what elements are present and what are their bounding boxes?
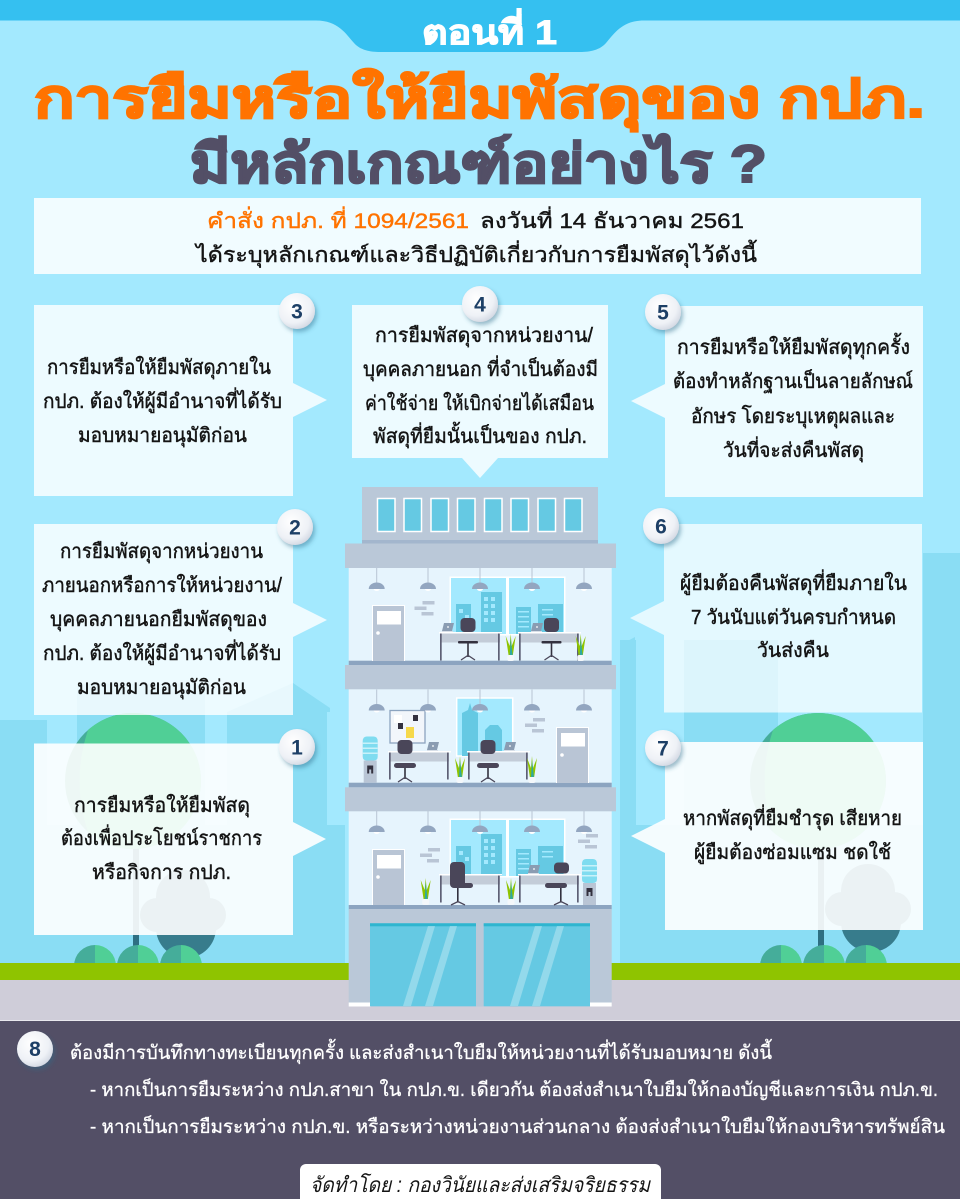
floor 1 office bbox=[369, 811, 598, 905]
badge 3 bbox=[279, 293, 315, 329]
credit box bbox=[300, 1164, 661, 1199]
grass strip bbox=[0, 963, 960, 980]
callout 2: การยืมพัสดุจากหน่วยงาน bbox=[60, 541, 263, 564]
callout 2: ภายนอกหรือการให้หน่วยงาน/ bbox=[42, 574, 282, 597]
callout 2: บุคคลภายนอกยืมพัสดุของ bbox=[50, 609, 267, 632]
badge 1 bbox=[279, 729, 315, 765]
callout 2 bbox=[34, 524, 327, 715]
callout 7 bbox=[631, 742, 923, 930]
skyline left bbox=[0, 683, 345, 963]
subtitle question: มีหลักเกณฑ์อย่างไร ? bbox=[190, 133, 767, 194]
road bbox=[0, 980, 960, 1020]
callout 5: อักษร โดยระบุเหตุผลและ bbox=[691, 405, 895, 429]
callout 1 bbox=[34, 744, 326, 935]
floor strips bbox=[349, 661, 612, 909]
callout 3: การยืมหรือให้ยืมพัสดุภายใน bbox=[47, 356, 271, 380]
callout 5: การยืมหรือให้ยืมพัสดุทุกครั้ง bbox=[677, 333, 910, 360]
callout 6 bbox=[630, 524, 922, 712]
callout 7: ผู้ยืมต้องซ่อมแซม ชดใช้ bbox=[694, 841, 891, 865]
badge 4 bbox=[462, 286, 498, 322]
bottom panel bbox=[0, 1020, 960, 1199]
callout 4: ค่าใช้จ่าย ให้เบิกจ่ายได้เสมือน bbox=[365, 392, 594, 415]
top banner tab bbox=[0, 0, 960, 52]
floor rooms background bbox=[349, 568, 612, 909]
order reference panel bbox=[34, 198, 921, 274]
callout 6: ผู้ยืมต้องคืนพัสดุที่ยืมภายใน bbox=[680, 569, 907, 596]
badge 5 bbox=[645, 294, 681, 330]
order description: ได้ระบุหลักเกณฑ์และวิธีปฏิบัติเกี่ยวกับการยืมพัสดุไว้ดังนี้ bbox=[194, 240, 757, 268]
episode label: ตอนที่ 1 bbox=[422, 8, 557, 52]
ground floor lobby bbox=[349, 909, 612, 1006]
badge 5: 5 bbox=[657, 302, 669, 324]
callout 3: มอบหมายอนุมัติก่อน bbox=[78, 425, 247, 448]
main title: การยืมหรือให้ยืมพัสดุของ กปภ. bbox=[34, 68, 925, 132]
badge 2: 2 bbox=[289, 516, 301, 540]
badge 1: 1 bbox=[291, 736, 303, 760]
left tree bbox=[65, 713, 201, 963]
order number: คำสั่ง กปภ. ที่ 1094/2561 bbox=[207, 206, 469, 233]
slabs bbox=[345, 544, 616, 811]
callout 5: ต้องทำหลักฐานเป็นลายลักษณ์ bbox=[673, 368, 913, 393]
callout 4 bbox=[352, 305, 608, 478]
callout 5 bbox=[631, 306, 923, 497]
badge 7: 7 bbox=[657, 738, 669, 760]
left small tree bbox=[140, 870, 226, 965]
badge 8: 8 bbox=[29, 1038, 41, 1061]
floor 2 office bbox=[363, 690, 592, 783]
building bbox=[345, 487, 616, 1006]
rule 8 first item: - หากเป็นการยืมระหว่าง กปภ.สาขา ใน กปภ.ข. เดียวกัน ต้องส่งสำเนาใบยืมให้กองบัญชีและการเงิน กปภ.ข. bbox=[90, 1077, 938, 1101]
badge 3: 3 bbox=[291, 300, 303, 324]
badge 6: 6 bbox=[655, 516, 667, 538]
callout 1: หรือกิจการ กปภ. bbox=[92, 862, 231, 884]
callout 2: กปภ. ต้องให้ผู้มีอำนาจที่ได้รับ bbox=[43, 639, 281, 666]
callout 5: วันที่จะส่งคืนพัสดุ bbox=[723, 436, 864, 463]
badge 2 bbox=[277, 509, 313, 545]
callout 7: หากพัสดุที่ยืมชำรุด เสียหาย bbox=[683, 804, 902, 831]
right bushes bbox=[760, 945, 887, 966]
callout 2: มอบหมายอนุมัติก่อน bbox=[77, 677, 246, 700]
callout 4: การยืมพัสดุจากหน่วยงาน/ bbox=[375, 325, 593, 348]
callout 6: วันส่งคืน bbox=[757, 640, 829, 662]
callout 6: 7 วันนับแต่วันครบกำหนด bbox=[691, 607, 896, 629]
credit text: จัดทำโดย : กองวินัยและส่งเสริมจริยธรรม bbox=[310, 1173, 651, 1197]
badge 6 bbox=[643, 508, 679, 544]
left bushes bbox=[74, 945, 202, 966]
badge 8 bbox=[17, 1031, 53, 1067]
right tree bbox=[750, 713, 886, 963]
callout 4: บุคคลภายนอก ที่จำเป็นต้องมี bbox=[363, 355, 598, 382]
rule 8 second item: - หากเป็นการยืมระหว่าง กปภ.ข. หรือระหว่างหน่วยงานส่วนกลาง ต้องส่งสำเนาใบยืมให้กองบริหารทรัพย์สิน bbox=[90, 1114, 945, 1138]
callout 4: พัสดุที่ยืมนั้นเป็นของ กปภ. bbox=[373, 422, 587, 449]
badge 7 bbox=[645, 730, 681, 766]
callout 1: การยืมหรือให้ยืมพัสดุ bbox=[74, 794, 250, 818]
order date: ลงวันที่ 14 ธันวาคม 2561 bbox=[480, 206, 744, 233]
right small tree bbox=[825, 864, 911, 959]
callout 3: กปภ. ต้องให้ผู้มีอำนาจที่ได้รับ bbox=[43, 387, 282, 414]
rooftop block bbox=[362, 487, 598, 544]
skyline right bbox=[620, 553, 960, 963]
badge 4: 4 bbox=[474, 294, 486, 316]
callout 1: ต้องเพื่อประโยชน์ราชการ bbox=[61, 824, 262, 850]
floor 3 office bbox=[369, 568, 592, 661]
callout 3 bbox=[34, 305, 327, 496]
rule 8 heading: ต้องมีการบันทึกทางทะเบียนทุกครั้ง และส่งสำเนาใบยืมให้หน่วยงานที่ได้รับมอบหมาย ดังนี้ bbox=[70, 1039, 772, 1065]
